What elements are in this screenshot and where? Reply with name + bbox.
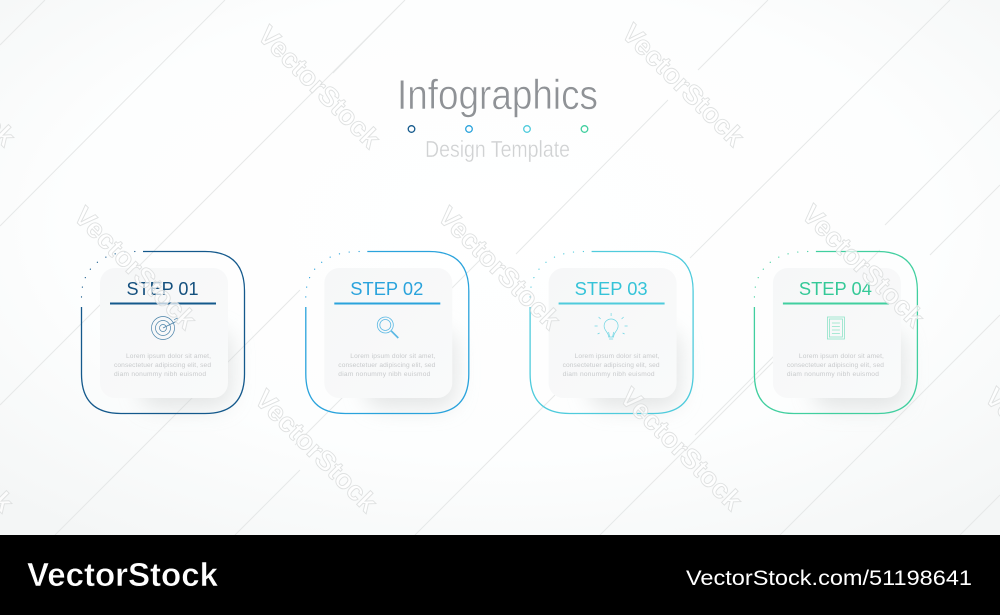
icon: document <box>827 317 844 339</box>
heading rule <box>783 302 889 304</box>
heading rule <box>334 302 440 304</box>
shadow <box>813 330 905 408</box>
inner panel <box>100 268 228 398</box>
outline <box>530 252 693 414</box>
dotted corner <box>530 252 584 297</box>
watermarks: VectorStock <box>796 199 931 334</box>
outline <box>754 252 917 414</box>
watermarks: VectorStock <box>252 20 387 155</box>
body text: diam nonummy nibh euismod <box>787 371 879 378</box>
body text: Lorem ipsum dolor sit amet, <box>350 353 435 360</box>
inner panel <box>549 268 677 398</box>
shadow <box>364 330 456 408</box>
outline <box>82 252 244 414</box>
step heading: STEP 01 <box>126 279 198 299</box>
watermarks: VectorStock <box>68 201 203 336</box>
footer bar <box>0 535 1000 615</box>
card 1: step 01 <box>82 252 244 414</box>
inner panel <box>324 268 452 398</box>
card 2: step 02 <box>306 252 469 414</box>
body text: diam nonummy nibh euismod <box>563 371 655 378</box>
subtitle: Design Template <box>425 136 570 162</box>
dotted corner <box>754 252 808 297</box>
body text <box>787 353 884 378</box>
step heading: STEP 04 <box>799 279 872 299</box>
dotted corner <box>306 252 359 297</box>
footer logo: VectorStock <box>27 556 219 593</box>
body text <box>338 353 436 378</box>
body text: consectetuer adipiscing elit, sed <box>338 362 436 369</box>
shadow <box>589 330 681 408</box>
body text: consectetuer adipiscing elit, sed <box>787 362 884 369</box>
body text: consectetuer adipiscing elit, sed <box>114 362 211 369</box>
body text <box>563 353 660 378</box>
watermarks: VectorStock <box>249 384 384 519</box>
inner panel <box>773 268 901 398</box>
body text: diam nonummy nibh euismod <box>114 371 206 378</box>
body text: consectetuer adipiscing elit, sed <box>563 362 660 369</box>
body text: Lorem ipsum dolor sit amet, <box>799 353 884 360</box>
outline <box>306 252 469 414</box>
step heading: STEP 02 <box>350 279 423 299</box>
body text: Lorem ipsum dolor sit amet, <box>126 353 211 360</box>
body text <box>114 353 211 378</box>
footer url: VectorStock.com/51198641 <box>686 567 972 590</box>
dotted corner <box>82 252 135 297</box>
title: Infographics <box>397 71 598 118</box>
icon: target <box>152 316 178 340</box>
heading rule <box>559 302 665 304</box>
shadow <box>140 330 232 408</box>
watermarks: VectorStock <box>432 201 567 336</box>
progress dots <box>408 126 588 132</box>
icon: magnifier <box>377 317 398 338</box>
watermarks: VectorStock <box>616 18 751 153</box>
step heading: STEP 03 <box>575 279 648 299</box>
card 3: step 03 <box>530 252 693 414</box>
watermarks: VectorStock <box>614 382 749 517</box>
body text: Lorem ipsum dolor sit amet, <box>575 353 660 360</box>
body text: diam nonummy nibh euismod <box>338 371 431 378</box>
card 4: step 04 <box>754 252 917 414</box>
heading rule <box>110 302 216 304</box>
icon: light bulb <box>595 313 628 339</box>
